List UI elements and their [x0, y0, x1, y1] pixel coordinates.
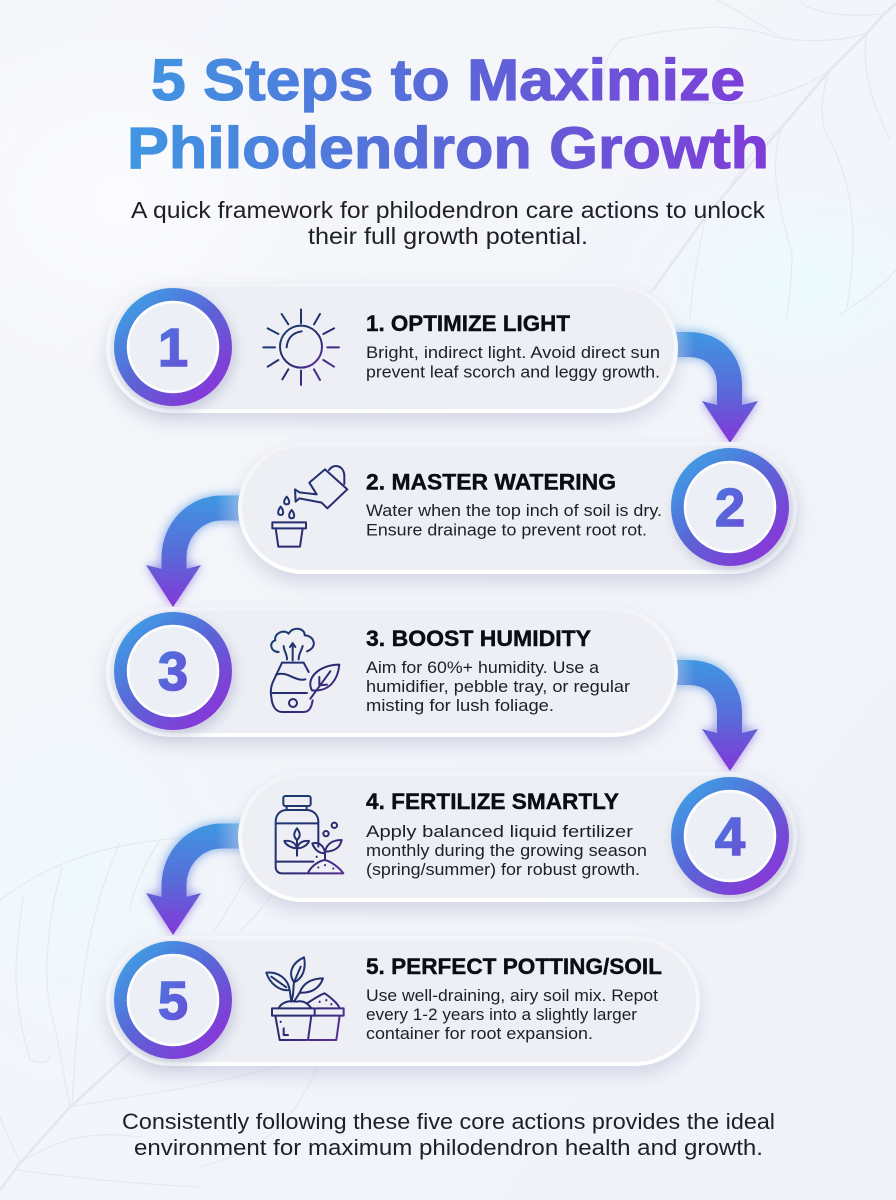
panel: step 5 perfect potting and soil: every 1-2 years into a slightly larger	[366, 1006, 638, 1024]
panel: step 4 fertilize smartly	[240, 774, 795, 900]
arrow: step 2 to step 3	[146, 496, 246, 607]
panel: step 2 master watering: 2	[715, 478, 745, 538]
panel: step 2 master watering: Ensure drainage to prevent root rot.	[366, 522, 647, 540]
panel: step 2 master watering	[240, 444, 795, 572]
icon: watering can	[272, 466, 347, 547]
panel: step 3 boost humidity: humidifier, pebble tray, or regular	[366, 678, 631, 696]
subtitle: A quick framework for philodendron care actions to unlock	[131, 197, 765, 223]
closing statement: Consistently following these five core actions provides the ideal	[122, 1109, 775, 1134]
panel: step 1 optimize light	[108, 285, 676, 411]
icon: sun	[263, 309, 339, 385]
panel: step 1 optimize light: 1. OPTIMIZE LIGHT	[366, 311, 571, 336]
panel: step 5 perfect potting and soil: Use well-draining, airy soil mix. Repot	[366, 987, 658, 1005]
closing statement	[122, 1109, 775, 1160]
panel: step 1 optimize light: Bright, indirect light. Avoid direct sun	[366, 344, 660, 362]
panel: step 5 perfect potting and soil: 5. PERFECT POTTING/SOIL	[366, 954, 662, 979]
panel: step 3 boost humidity: Aim for 60%+ humidity. Use a	[366, 659, 600, 677]
panel: step 5 perfect potting and soil: container for root expansion.	[366, 1025, 593, 1043]
panel: step 2 master watering: Water when the top inch of soil is dry.	[366, 502, 662, 520]
icon: humidifier and leaf	[271, 629, 339, 712]
subtitle: their full growth potential.	[308, 223, 588, 249]
panel: step 3 boost humidity	[108, 609, 676, 735]
panel: step 2 master watering: 2. MASTER WATERING	[366, 470, 616, 494]
closing statement: environment for maximum philodendron health and growth.	[134, 1135, 763, 1160]
panel: step 1 optimize light: prevent leaf scorch and leggy growth.	[366, 364, 660, 382]
arrow: step 1 to step 2	[672, 332, 758, 443]
panel: step 3 boost humidity: 3. BOOST HUMIDITY	[366, 626, 591, 651]
subtitle	[131, 197, 765, 249]
arrow: step 3 to step 4	[672, 660, 758, 771]
panel: step 1 optimize light: 1	[158, 318, 188, 378]
panel: step 4 fertilize smartly: monthly during the growing season	[366, 842, 647, 860]
panel: step 4 fertilize smartly: 4. FERTILIZE SMARTLY	[366, 789, 619, 814]
icon: potted plant and soil	[266, 957, 344, 1040]
title: Philodendron Growth	[127, 116, 769, 181]
panel: step 4 fertilize smartly: 4	[715, 807, 745, 867]
icon: fertilizer bottle and sprout	[276, 796, 343, 873]
title: 5 Steps to Maximize	[151, 48, 745, 113]
arrow: step 4 to step 5	[146, 824, 246, 935]
panel: step 3 boost humidity: misting for lush foliage.	[366, 697, 554, 715]
panel: step 5 perfect potting and soil	[108, 938, 698, 1064]
title	[127, 48, 769, 181]
panel: step 3 boost humidity: 3	[158, 642, 188, 702]
panel: step 4 fertilize smartly: (spring/summer) for robust growth.	[366, 861, 640, 879]
panel: step 5 perfect potting and soil: 5	[158, 971, 188, 1031]
panel: step 4 fertilize smartly: Apply balanced liquid fertilizer	[366, 823, 634, 841]
